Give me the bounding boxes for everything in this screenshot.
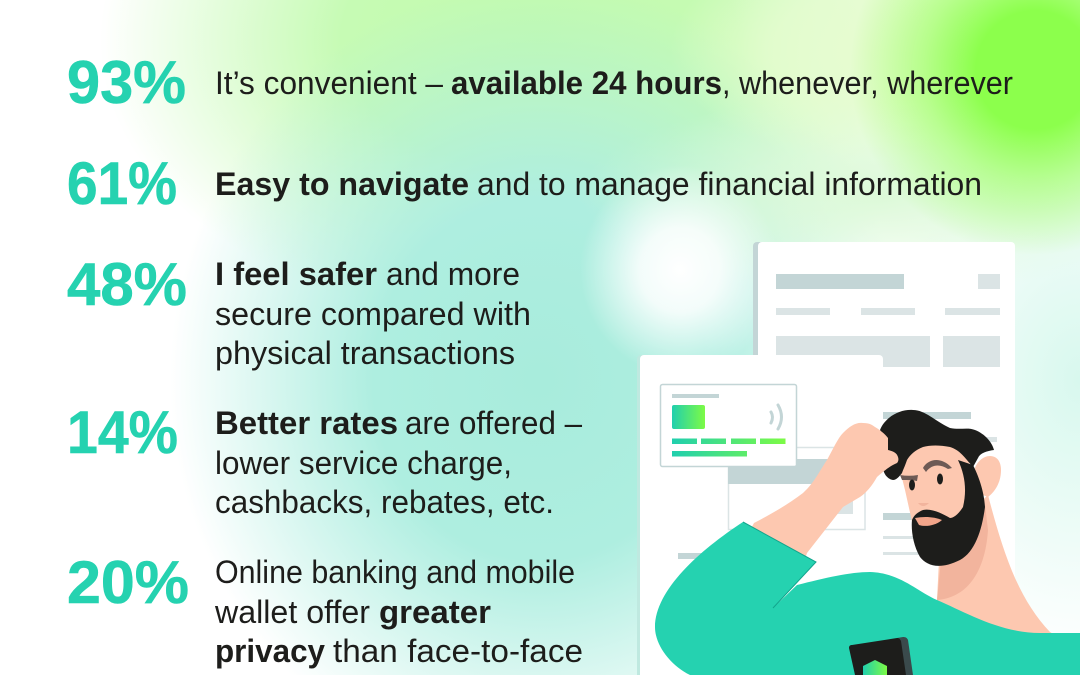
statement: easy to navigate: and to manage financial information bbox=[477, 166, 982, 202]
stat row: 93% convenient bbox=[67, 49, 1013, 116]
statement: greater privacy: privacy bbox=[215, 633, 325, 669]
statement: greater privacy: Online banking and mobile bbox=[215, 554, 575, 590]
statement: easy to navigate: Easy to navigate bbox=[215, 166, 469, 202]
back document bbox=[753, 242, 1015, 675]
statement: feel safer bbox=[215, 256, 531, 371]
statement: available 24 hours: available 24 hours bbox=[451, 65, 722, 101]
stat number 20%: 20% bbox=[67, 549, 189, 616]
stat number 61%: 61% bbox=[67, 150, 177, 217]
illustration: man with banking documents bbox=[637, 242, 1080, 675]
shirt bbox=[655, 522, 1080, 675]
eyes bbox=[909, 474, 943, 490]
statement: greater privacy: greater bbox=[379, 594, 491, 630]
ear bbox=[973, 456, 1001, 497]
statement: greater privacy: than face-to-face bbox=[333, 633, 583, 669]
face bbox=[900, 445, 978, 540]
stat number 93%: 93% bbox=[67, 49, 186, 116]
mouth bbox=[915, 517, 942, 526]
statement: feel safer: secure compared with bbox=[215, 296, 531, 332]
statement: better rates: Better rates bbox=[215, 405, 398, 441]
person bbox=[655, 410, 1080, 675]
hair bbox=[880, 410, 994, 480]
raised arm bbox=[745, 423, 898, 575]
statement: greater privacy: wallet offer bbox=[214, 594, 370, 630]
statement: feel safer: and more bbox=[386, 256, 520, 292]
statement: greater privacy bbox=[214, 554, 583, 669]
eyebrows bbox=[900, 460, 952, 481]
statement: available 24 hours: It’s convenient – bbox=[215, 65, 443, 101]
stat number 14%: 14% bbox=[67, 399, 178, 466]
neck bbox=[937, 495, 1080, 650]
front document bbox=[637, 355, 883, 675]
statement: feel safer: I feel safer bbox=[215, 256, 377, 292]
statement: easy to navigate bbox=[215, 166, 982, 202]
stat row: 48% feel safer bbox=[67, 251, 531, 371]
statement: better rates bbox=[215, 405, 582, 520]
statement: better rates: are offered – bbox=[405, 405, 582, 441]
stat number 48%: 48% bbox=[67, 251, 187, 318]
nose bbox=[918, 503, 929, 506]
stat row: 14% better rates bbox=[67, 399, 582, 520]
statement: available 24 hours bbox=[215, 65, 1013, 101]
sleeve edge bbox=[743, 522, 816, 608]
statement: better rates: cashbacks, rebates, etc. bbox=[215, 484, 554, 520]
statement: feel safer: physical transactions bbox=[215, 335, 515, 371]
icon: credit card bbox=[660, 384, 796, 466]
statement: available 24 hours: , whenever, wherever bbox=[722, 65, 1013, 101]
statement: better rates: lower service charge, bbox=[215, 445, 512, 481]
stat row: 20% greater privacy bbox=[67, 549, 583, 669]
beard bbox=[912, 460, 985, 566]
stat row: 61% easy to navigate bbox=[67, 150, 982, 217]
neck shadow bbox=[937, 505, 988, 600]
icon: phone with shield bbox=[849, 637, 913, 675]
